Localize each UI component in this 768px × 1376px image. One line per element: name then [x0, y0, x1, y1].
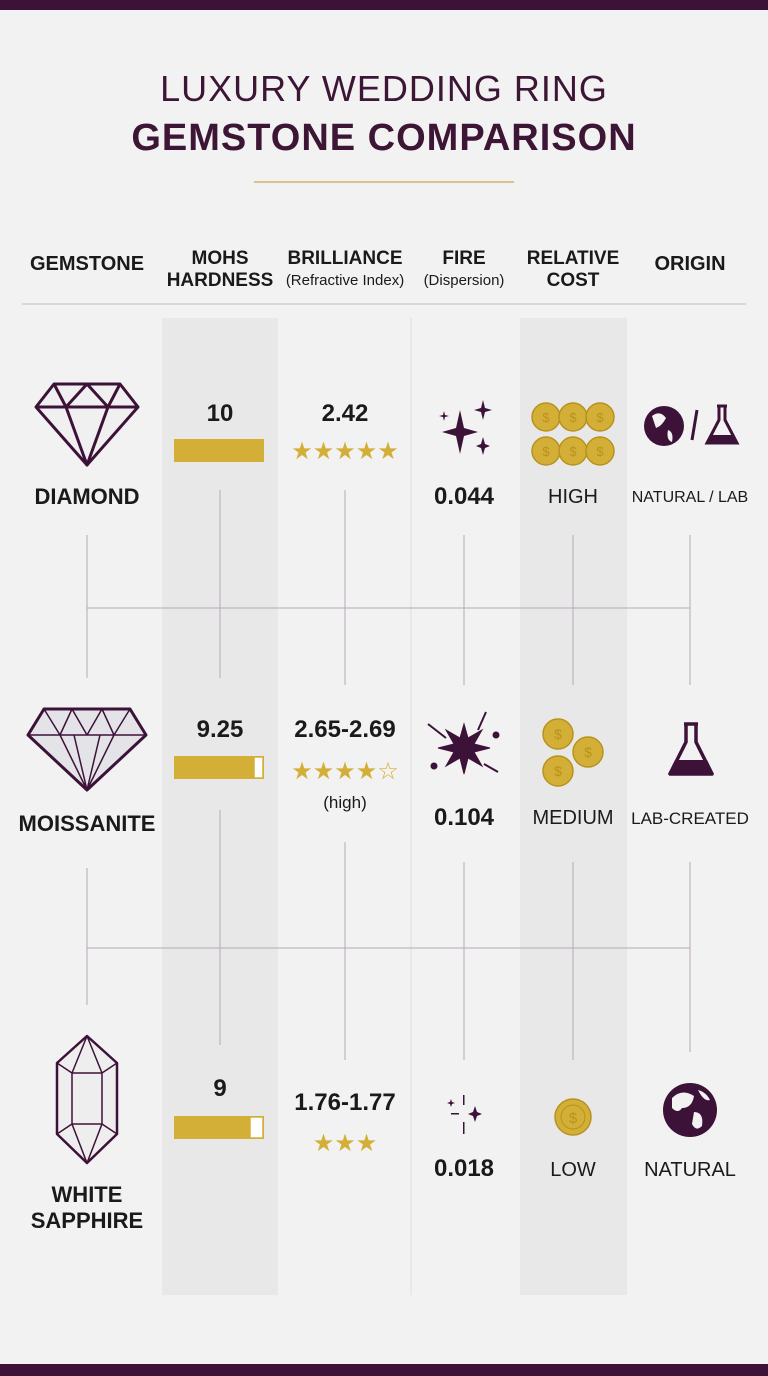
title: LUXURY WEDDING RING — [160, 68, 608, 109]
header row: ORIGIN — [654, 253, 726, 275]
icon: coins six — [532, 403, 614, 465]
connectors — [87, 490, 690, 1060]
row: moissanite: LAB-CREATED — [631, 809, 749, 828]
row: white sapphire: LOW — [550, 1159, 596, 1181]
icon: coins three — [543, 719, 603, 786]
row: diamond: $ — [596, 444, 604, 459]
row: moissanite: 0.104 — [434, 804, 495, 831]
icon: globe / flask — [644, 406, 738, 446]
row: white sapphire — [31, 1036, 736, 1233]
row: diamond: $ — [542, 410, 550, 425]
row: moissanite: MOISSANITE — [19, 811, 155, 836]
row: white sapphire: 9 — [213, 1075, 227, 1102]
row: diamond: NATURAL / LAB — [632, 489, 748, 506]
icon: crystal — [57, 1036, 117, 1163]
row: white sapphire: SAPPHIRE — [31, 1208, 143, 1233]
icon: one coin: $ — [569, 1110, 578, 1127]
row: diamond: 10 — [207, 400, 233, 427]
icon: flask — [668, 724, 714, 774]
header row — [30, 248, 726, 291]
row: moissanite: 9.25 — [197, 716, 243, 743]
header row: GEMSTONE — [30, 253, 144, 275]
icon: moissanite — [28, 709, 146, 790]
icon: one coin — [555, 1099, 591, 1135]
header row: FIRE — [442, 248, 486, 269]
row: diamond — [34, 384, 748, 510]
icon: sparkles — [439, 400, 492, 455]
row: moissanite: (high) — [323, 793, 367, 812]
header row: MOHS — [192, 248, 248, 269]
row: diamond: ★★★★★ — [291, 437, 399, 465]
row: white sapphire: 0.018 — [434, 1155, 494, 1182]
row: moissanite: $ — [584, 744, 592, 760]
row: diamond: DIAMOND — [34, 484, 140, 509]
row: white sapphire: 1.76-1.77 — [294, 1089, 396, 1116]
row: moissanite — [19, 709, 749, 836]
row: diamond: 2.42 — [322, 400, 368, 427]
header row: RELATIVE — [527, 248, 619, 269]
header row: (Refractive Index) — [286, 272, 404, 289]
header row: HARDNESS — [167, 270, 273, 291]
title: GEMSTONE COMPARISON — [131, 117, 637, 159]
row: moissanite: MEDIUM — [532, 807, 614, 829]
icon: burst — [428, 712, 499, 774]
row: white sapphire: ★★★ — [313, 1129, 377, 1157]
row: moissanite: $ — [554, 726, 562, 742]
row: diamond: $ — [569, 444, 577, 459]
row: white sapphire: WHITE — [52, 1182, 122, 1207]
row: white sapphire: NATURAL — [644, 1159, 736, 1181]
row: moissanite: $ — [554, 763, 562, 779]
header row: BRILLIANCE — [287, 248, 403, 269]
row: diamond: $ — [596, 410, 604, 425]
title — [131, 68, 637, 159]
row: diamond: $ — [542, 444, 550, 459]
header row: (Dispersion) — [424, 272, 504, 289]
row: diamond: 0.044 — [434, 483, 495, 510]
column backgrounds — [162, 318, 627, 1295]
row: diamond: HIGH — [548, 486, 598, 508]
row: moissanite: ★★★★☆ — [291, 757, 399, 785]
row: diamond: $ — [569, 410, 577, 425]
row: moissanite: 2.65-2.69 — [294, 716, 396, 743]
icon: faint sparkle — [447, 1095, 482, 1134]
header row: COST — [547, 270, 600, 291]
icon: diamond — [36, 384, 138, 465]
icon: globe — [663, 1083, 717, 1137]
